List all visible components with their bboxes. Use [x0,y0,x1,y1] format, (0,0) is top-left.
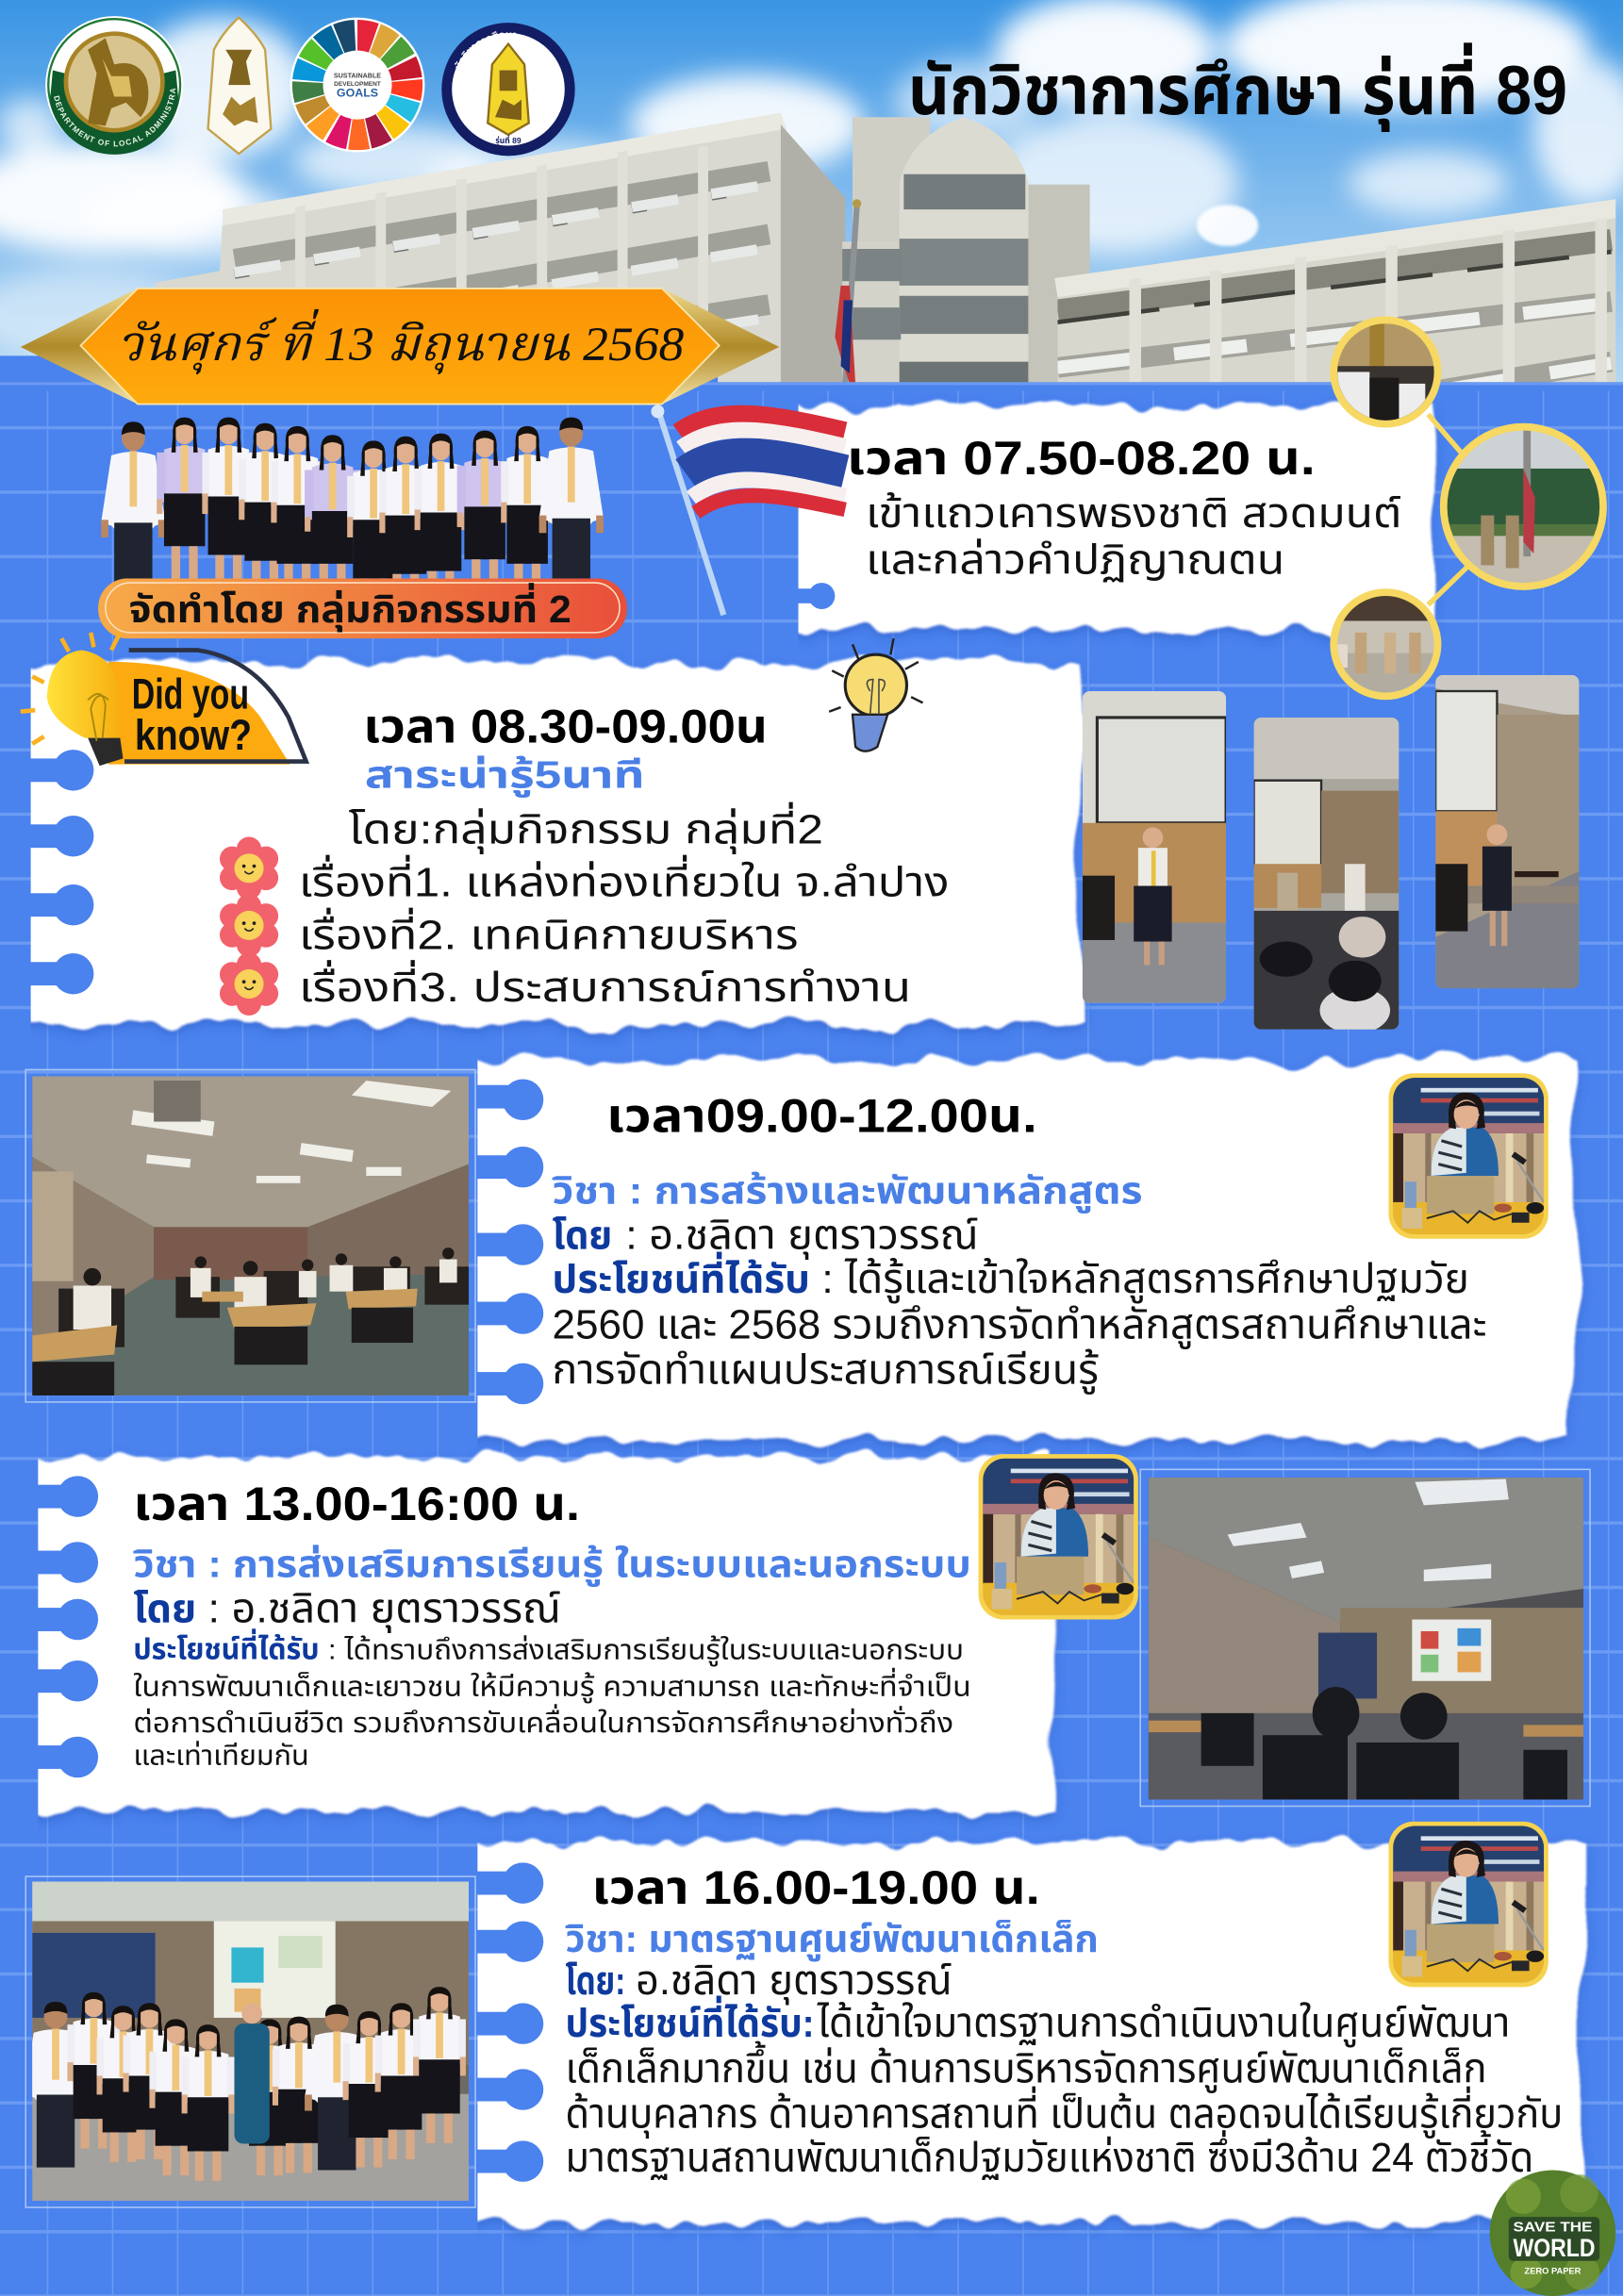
badge: save the world zero paper [1490,2170,1615,2296]
flag ceremony description: และกล่าวคำปฏิญาณตน [866,538,1284,584]
panel: learning promotion paper [0,1457,1054,1811]
topic list with flower bullets: เรื่องที่1. แหล่งท่องเที่ยวใน จ.ลำปาง [299,854,950,905]
learning promotion benefits: ต่อการดำเนินชีวิต รวมถึงการขับเคลื่อนในการจัดการศึกษาอย่างทั่วถึง [133,1704,953,1739]
curriculum benefits: : ได้รู้และเข้าใจหลักสูตรการศึกษาปฐมวัย [821,1257,1469,1303]
topic list with flower bullets [220,837,950,1016]
photo: class group with lecturer [24,1876,475,2207]
logo: academic class 89 seal: รุ่นที่ 89 [495,135,522,145]
standards benefits: ด้านบุคลากร ด้านอาคารสถานที่ เป็นต้น ตลอดจนได้เรียนรู้เกี่ยวกับ [566,2086,1563,2138]
standards lecturer: โดย: [566,1958,625,2003]
curriculum course title: วิชา : การสร้างและพัฒนาหลักสูตร [552,1169,1143,1214]
curriculum benefits: การจัดทำแผนประสบการณ์เรียนรู้ [553,1348,1099,1395]
logo: sustainable development goals wheel: DEVELOPMENT [334,81,381,88]
group credit pill [98,578,627,638]
photo: speaker at screen [1083,691,1226,1003]
icon: did you know badge: know? [135,711,252,759]
building: left wing [156,113,845,400]
curriculum benefits: ประโยชน์ที่ได้รับ [553,1251,810,1301]
building flagpole [835,199,861,384]
building: central tower [842,117,1090,384]
panel: curriculum paper [448,1060,1575,1441]
did you know subtitle: สาระน่ารู้5นาที [365,752,644,798]
standards course title: วิชา: มาตรฐานศูนย์พัฒนาเด็กเล็ก [565,1917,1099,1962]
photo: room with projected slide [1140,1469,1590,1807]
learning promotion course title: วิชา : การส่งเสริมการเรียนรู้ ในระบบและนอกระบบ [133,1543,971,1588]
curriculum lecturer: โดย [553,1214,612,1258]
panel: did you know paper [0,662,1081,1025]
logo: shield emblem [208,18,271,154]
standards benefits: มาตรฐานสถานพัฒนาเด็กปฐมวัยแห่งชาติ ซึ่งมี3ด้าน 24 ตัวชี้วัด [566,2130,1533,2181]
topic list with flower bullets: เรื่องที่2. เทคนิคกายบริหาร [299,907,799,958]
learning promotion benefits: : ได้ทราบถึงการส่งเสริมการเรียนรู้ในระบบและนอกระบบ [328,1634,964,1666]
learning promotion benefits [133,1627,971,1771]
learning promotion benefits: และเท่าเทียมกัน [133,1740,309,1771]
icon: did you know badge: Did you [132,670,249,719]
logo: academic class 89 seal: นักวิชาการศึกษา [455,31,517,68]
logo: sustainable development goals wheel: SUSTAINABLE [334,72,381,79]
badge: save the world zero paper: ZERO PAPER [1525,2267,1582,2276]
learning promotion benefits: ประโยชน์ที่ได้รับ [133,1627,320,1665]
panel: child development standards paper [448,1842,1582,2222]
portrait thumbnail: lecturer [1388,1073,1548,1239]
learning promotion benefits: ในการพัฒนาเด็กและเยาวชน ให้มีความรู้ ความสามารถ และทักษะที่จำเป็น [133,1667,971,1703]
standards benefits: ได้เข้าใจมาตรฐานการดำเนินงานในศูนย์พัฒนา [817,2001,1510,2047]
date banner [21,289,779,405]
standards lecturer: อ.ชลิดา ยุตราวรรณ์ [636,1958,952,2005]
standards benefits [566,1995,1563,2181]
badge: save the world zero paper: WORLD [1514,2234,1595,2262]
logo: sustainable development goals wheel [287,14,428,156]
curriculum benefits: 2560 และ 2568 รวมถึงการจัดทำหลักสูตรสถานศึกษาและ [553,1302,1487,1348]
topic list with flower bullets: เรื่องที่3. ประสบการณ์การทำงาน [299,960,911,1011]
learning promotion time heading: เวลา 13.00-16:00 น. [133,1478,580,1530]
date banner: วันศุกร์ ที่ 13 มิถุนายน 2568 [117,308,685,375]
header sky with clouds [0,0,1623,384]
flag ceremony description: เข้าแถวเคารพธงชาติ สวดมนต์ [866,491,1401,537]
portrait thumbnail: lecturer [979,1454,1138,1620]
photo: speaker by sofa [1435,675,1579,988]
icon: thai flag with pole [651,405,845,615]
curriculum benefits [553,1251,1487,1395]
icon: did you know badge [21,633,306,766]
flag ceremony time heading: เวลา 07.50-08.20 น. [847,432,1316,485]
standards time heading: เวลา 16.00-19.00 น. [592,1861,1040,1914]
photo: classroom wide view [25,1069,475,1402]
did you know time heading: เวลา 08.30-09.00น [363,700,768,752]
standards benefits: เด็กเล็กมากขึ้น เช่น ด้านการบริหารจัดการศูนย์พัฒนาเด็กเล็ก [566,2040,1487,2092]
portrait thumbnail: lecturer [1388,1822,1548,1987]
badge: save the world zero paper: SAVE THE [1514,2221,1593,2236]
logo: academic class 89 seal [441,23,575,157]
title: นักวิชาการศึกษา รุ่นที่ 89 [908,42,1567,132]
learning promotion lecturer: โดย [133,1587,196,1631]
icon: light bulb with rays [829,638,923,752]
building: right wing [1054,199,1616,383]
curriculum time heading: เวลา09.00-12.00น. [606,1089,1037,1142]
panel: flag ceremony paper [769,405,1435,630]
team group photo [101,418,604,611]
logo: department of local administration [45,16,215,155]
standards benefits: ประโยชน์ที่ได้รับ: [566,1995,815,2045]
photo: class exercising [1254,718,1399,1033]
learning promotion lecturer: : อ.ชลิดา ยุตราวรรณ์ [208,1587,561,1633]
presenter line: โดย:กลุ่มกิจกรรม กลุ่มที่2 [349,801,823,853]
logo: sustainable development goals wheel: GOALS [337,86,378,99]
ceremony photo circles [1326,315,1607,700]
group credit pill: จัดทำโดย กลุ่มกิจกรรมที่ 2 [129,583,571,633]
flag ceremony description [866,491,1401,584]
blue page area under header [0,355,1623,391]
curriculum lecturer: : อ.ชลิดา ยุตราวรรณ์ [625,1214,979,1260]
